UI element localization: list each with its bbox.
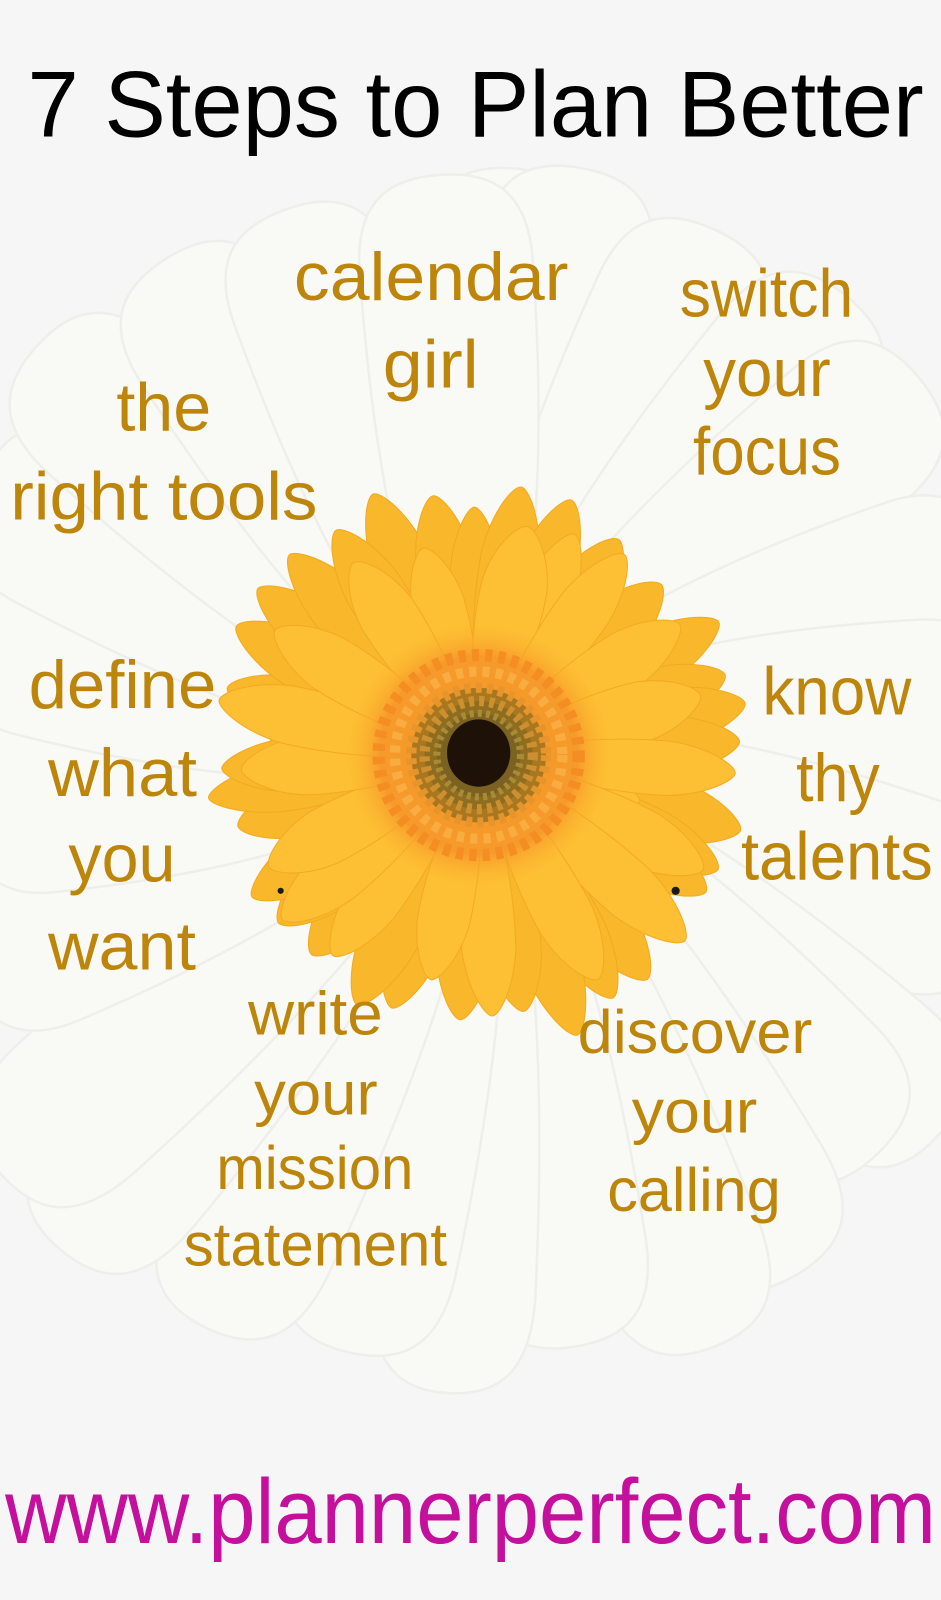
white daisy petals bbox=[0, 153, 941, 1397]
step label: switch your focus bbox=[680, 256, 853, 489]
title: 7 Steps to Plan Better bbox=[28, 52, 924, 157]
inner petal layer bbox=[213, 520, 737, 1017]
icon: yellow gerbera flower bbox=[205, 482, 751, 1045]
step label: switch your focus: your bbox=[703, 336, 831, 411]
step label: know thy talents bbox=[741, 654, 933, 895]
step label: discover your calling bbox=[578, 998, 812, 1224]
small dark specks bbox=[278, 887, 680, 895]
step label: calendar girl bbox=[294, 240, 568, 403]
step label: write your mission statement: statement bbox=[184, 1210, 447, 1278]
step label: know thy talents: know bbox=[762, 654, 912, 729]
step label: calendar girl: girl bbox=[383, 328, 479, 403]
step label: switch your focus: focus bbox=[693, 414, 841, 489]
step label: define what you want: want bbox=[47, 909, 196, 984]
step label: know thy talents: talents bbox=[741, 820, 933, 895]
outer petal layer bbox=[205, 482, 751, 1045]
step label: discover your calling: calling bbox=[607, 1156, 781, 1224]
step label: write your mission statement: write bbox=[247, 980, 383, 1048]
step label: the right tools: right tools bbox=[10, 459, 317, 534]
step label: write your mission statement: mission bbox=[216, 1134, 413, 1202]
step label: define what you want: define bbox=[29, 648, 216, 723]
flower centre bbox=[348, 624, 609, 886]
step label: know thy talents: thy bbox=[796, 741, 880, 816]
step label: write your mission statement: your bbox=[254, 1059, 378, 1127]
step label: switch your focus: switch bbox=[680, 256, 853, 331]
step label: write your mission statement bbox=[184, 980, 447, 1278]
step label: define what you want bbox=[29, 648, 216, 984]
step label: define what you want: what bbox=[47, 736, 197, 811]
step label: the right tools: the bbox=[116, 371, 211, 446]
step label: discover your calling: discover bbox=[578, 998, 812, 1066]
step label: define what you want: you bbox=[68, 822, 176, 897]
step label: the right tools bbox=[10, 371, 317, 534]
step label: discover your calling: your bbox=[632, 1078, 757, 1146]
step label: calendar girl: calendar bbox=[294, 240, 568, 315]
